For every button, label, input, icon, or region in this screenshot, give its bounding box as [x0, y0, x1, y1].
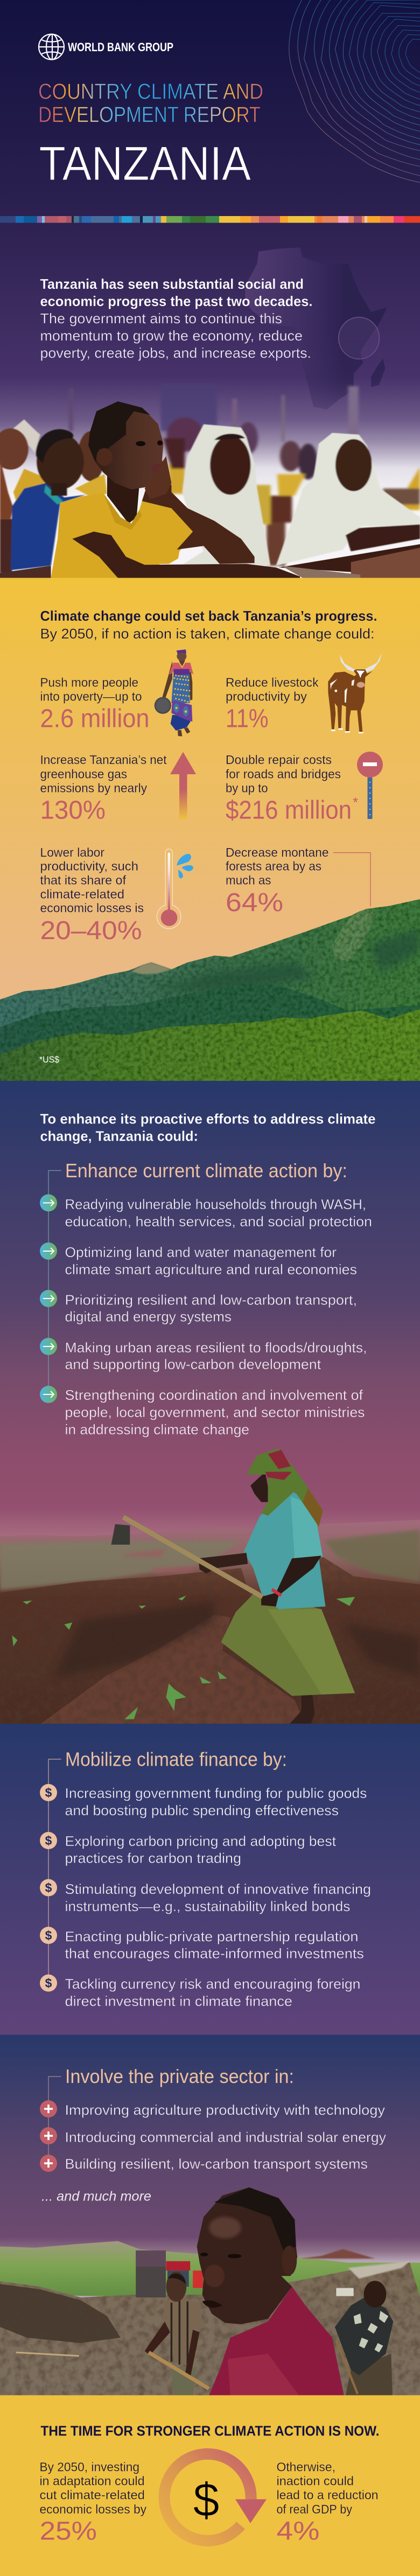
- panel: climate impacts background: [0, 578, 420, 1081]
- stat: livestock: Reduce livestock: [226, 676, 319, 690]
- stat: montane forests: forests area by as: [226, 859, 321, 873]
- stat: adaptation: By 2050, investing: [40, 2460, 139, 2474]
- left worker: [145, 2272, 209, 2396]
- list item: transport: [40, 1290, 357, 1324]
- map: Africa with Tanzania highlighted: [245, 247, 387, 409]
- stat: labor productivity: economic losses is: [40, 901, 144, 915]
- list item: WASH: Readying vulnerable households through WASH,: [65, 1196, 366, 1212]
- stat: montane forests: 64%: [226, 888, 283, 917]
- list item: carbon pricing: practices for carbon trading: [65, 1850, 241, 1866]
- stat: inaction: Otherwise,: [277, 2460, 335, 2474]
- list item: currency risk: Tackling currency risk and encouraging foreign: [65, 1976, 361, 1992]
- list item: carbon pricing: [40, 1832, 337, 1866]
- list item: solar: Introducing commercial and industrial solar energy: [65, 2129, 386, 2145]
- stat: repair costs: *: [353, 794, 358, 810]
- list item: coordination: people, local government, and sector ministries: [65, 1404, 365, 1420]
- barrel and machine: [136, 2251, 203, 2297]
- panel: proactive efforts background: [0, 1081, 420, 1724]
- list item: financing instruments: Stimulating development of innovative financing: [65, 1881, 371, 1897]
- seedlings: [12, 1595, 355, 1719]
- list item: carbon pricing: Exploring carbon pricing and adopting best: [65, 1833, 337, 1849]
- far ridge: [0, 899, 420, 1082]
- stat: labor productivity: 20–40%: [40, 916, 142, 945]
- list item: partnership regulation: that encourages climate-informed investments: [65, 1945, 364, 1961]
- icon: circular arrow with dollar sign: $: [193, 2473, 219, 2526]
- icon: globe: [39, 34, 64, 59]
- field: [0, 1520, 420, 1724]
- list item: currency risk: $: [45, 1976, 52, 1990]
- list item: financing instruments: [40, 1879, 371, 1914]
- list item: government funding: [40, 1784, 367, 1818]
- farmer: [198, 1448, 355, 1724]
- heading: climate change could set back progress: By 2050, if no action is taken, climate change could:: [40, 626, 375, 642]
- furrow shadows: [54, 1601, 420, 1678]
- foreground man: [197, 2188, 344, 2397]
- stat: labor productivity: that its share of: [40, 873, 126, 887]
- stat: livestock: [226, 676, 319, 733]
- list item: carbon pricing: $: [45, 1834, 52, 1848]
- list item: land and water: [40, 1242, 357, 1277]
- icon: circular arrow with dollar sign: [164, 2454, 267, 2540]
- right worker: [335, 2281, 393, 2396]
- list item: urban: Making urban areas resilient to floods/droughts,: [65, 1339, 367, 1356]
- stat: emissions: emissions by nearly: [40, 781, 147, 795]
- timeline connector: [48, 2077, 61, 2163]
- stat: emissions: greenhouse gas: [40, 767, 127, 781]
- stat: inaction: [277, 2460, 378, 2545]
- stat: labor productivity: climate-related: [40, 887, 124, 901]
- highlight circle: [339, 317, 379, 359]
- stat: inaction: of real GDP by: [277, 2502, 352, 2516]
- timeline connector: [48, 1759, 61, 1983]
- intro text: Tanzania has seen substantial social and: [40, 276, 304, 292]
- list item: land and water: climate smart agriculture and rural economies: [65, 1261, 357, 1277]
- stat: repair costs: [226, 753, 358, 824]
- stat: poverty: into poverty—up to: [40, 690, 142, 704]
- icon: thermometer with sweat drops: [157, 849, 193, 929]
- continent: [245, 247, 387, 409]
- heading: enhance proactive efforts: change, Tanzania could:: [40, 1128, 198, 1144]
- intro text: The government aims to continue this: [40, 310, 282, 327]
- intro text: economic progress the past two decades.: [40, 293, 312, 309]
- intro text: momentum to grow the economy, reduce: [40, 328, 303, 344]
- student in white hijab, middle: [182, 424, 270, 566]
- student in white hijab, right: [276, 433, 420, 566]
- valley shadows: [150, 928, 420, 991]
- list item: partnership regulation: Enacting public-private partnership regulation: [65, 1928, 359, 1945]
- subheading: enhance current climate action: Enhance current climate action by:: [65, 1159, 347, 1182]
- stat: labor productivity: Lower labor: [40, 845, 104, 859]
- list item: currency risk: [40, 1974, 361, 2009]
- list item: agriculture: Improving agriculture productivity with technology: [65, 2102, 385, 2118]
- list item: coordination: in addressing climate change: [65, 1421, 249, 1438]
- list item: government funding: $: [45, 1786, 52, 1800]
- report title: COUNTRY CLIMATE AND: [38, 79, 263, 103]
- list item: land and water: Optimizing land and water management for: [65, 1244, 337, 1260]
- list item: WASH: [40, 1194, 372, 1230]
- list item: transport: Building resilient, low-carbon transport systems: [65, 2156, 368, 2172]
- stat: emissions: Increase Tanzania’s net: [40, 753, 167, 767]
- panel: climate finance background: [0, 1724, 420, 2035]
- stat: livestock: productivity by: [226, 690, 307, 704]
- icon: woman carrying a pot: [155, 649, 193, 737]
- sunlit slope: [332, 909, 375, 961]
- arrow: rising emissions: [170, 752, 196, 820]
- intro text: poverty, create jobs, and increase exports.: [40, 345, 311, 361]
- front canopy: [0, 1009, 420, 1082]
- panel: header and intro background: [0, 0, 420, 578]
- stat: montane forests: much as: [226, 873, 271, 887]
- stat: repair costs: by up to: [226, 781, 268, 795]
- stat: poverty: [40, 676, 150, 733]
- heading: enhance proactive efforts: [40, 1111, 376, 1144]
- stat: adaptation: in adaptation could: [40, 2474, 144, 2488]
- stat: inaction: 4%: [277, 2517, 320, 2545]
- list item: transport: digital and energy systems: [65, 1308, 232, 1324]
- stat: montane forests: [226, 845, 328, 917]
- icon: long-horned cow: [328, 653, 382, 733]
- list item: transport: Prioritizing resilient and low-carbon transport,: [65, 1292, 357, 1308]
- stat: inaction: inaction could: [277, 2474, 354, 2488]
- soil: [0, 1554, 420, 1724]
- contour line pattern: [289, 0, 420, 183]
- rocky peak: [131, 962, 171, 974]
- heading: Tanzania: TANZANIA: [39, 136, 251, 190]
- dirt: [0, 2262, 420, 2397]
- stat: repair costs: Double repair costs: [226, 753, 332, 767]
- photo: schoolchildren in a classroom: [0, 384, 420, 578]
- blurred background: [69, 384, 420, 566]
- stat: livestock: 11%: [226, 705, 268, 733]
- stat: labor productivity: productivity, such: [40, 859, 138, 873]
- photo: forested mountains: [0, 899, 420, 1082]
- main student: [51, 401, 300, 578]
- stat: poverty: Push more people: [40, 676, 138, 690]
- middle ridge: [0, 984, 420, 1082]
- wordmark: WORLD BANK GROUP: [68, 40, 173, 54]
- list item: urban: and supporting low-carbon development: [65, 1356, 321, 1372]
- panel: private sector background: [0, 2035, 420, 2396]
- stat: montane forests: Decrease montane: [226, 845, 328, 859]
- photo: woman hoeing a field: [0, 1448, 420, 1724]
- intro text: [40, 276, 312, 361]
- colour strip: [0, 216, 420, 223]
- heading: enhance proactive efforts: To enhance its proactive efforts to address climate: [40, 1111, 376, 1127]
- grass: [0, 2241, 420, 2300]
- desk: [278, 544, 420, 578]
- subheading: mobilize climate finance: Mobilize climate finance by:: [65, 1748, 287, 1770]
- stat: emissions: [40, 753, 167, 824]
- report title: DEVELOPMENT REPORT: [38, 102, 261, 127]
- panel: call to action: [0, 2396, 420, 2576]
- Madagascar: [371, 359, 385, 387]
- list item: partnership regulation: $: [45, 1928, 52, 1942]
- list item: coordination: Strengthening coordination and involvement of: [65, 1387, 363, 1403]
- stat: repair costs: for roads and bridges: [226, 767, 341, 781]
- stat: adaptation: [40, 2460, 146, 2545]
- timeline connector: [48, 1170, 61, 1394]
- icon: road sign: [357, 752, 383, 819]
- stat: inaction: lead to a reduction: [277, 2488, 378, 2502]
- stat: labor productivity: [40, 845, 144, 945]
- callout line to mountain: [333, 852, 370, 906]
- stat: repair costs: $216 million: [226, 796, 352, 824]
- heading: the time is now: THE TIME FOR STRONGER CLIMATE ACTION IS NOW.: [41, 2422, 379, 2439]
- list item: urban: [40, 1338, 367, 1372]
- list item: government funding: Increasing government funding for public goods: [65, 1785, 367, 1801]
- left students: [0, 419, 107, 573]
- list item: partnership regulation: [40, 1927, 364, 1961]
- photo: men digging: [0, 2188, 420, 2397]
- list item: WASH: education, health services, and social protection: [65, 1213, 372, 1230]
- bench: [0, 566, 51, 578]
- stat: adaptation: 25%: [40, 2517, 97, 2545]
- stat: emissions: 130%: [40, 796, 106, 824]
- list item: coordination: [40, 1386, 365, 1438]
- footnote: *US$: [39, 1054, 60, 1065]
- subheading: involve the private sector: Involve the private sector in:: [65, 2065, 294, 2087]
- list item: government funding: and boosting public spending effectiveness: [65, 1802, 339, 1818]
- note: and much more: ... and much more: [41, 2189, 151, 2204]
- list item: currency risk: direct investment in climate finance: [65, 1993, 292, 2009]
- list item: financing instruments: instruments—e.g., sustainability linked bonds: [65, 1898, 350, 1914]
- heading: climate change could set back progress: [40, 608, 377, 642]
- heading: climate change could set back progress: Climate change could set back Tanzania’s progress.: [40, 608, 377, 624]
- stat: poverty: 2.6 million: [40, 705, 150, 733]
- stat: adaptation: economic losses by: [40, 2502, 146, 2516]
- logo: World Bank Group: [39, 34, 173, 59]
- hoe: [111, 1517, 263, 1597]
- stat: adaptation: cut climate-related: [40, 2488, 145, 2502]
- report title: [38, 79, 263, 127]
- list item: financing instruments: $: [45, 1880, 52, 1894]
